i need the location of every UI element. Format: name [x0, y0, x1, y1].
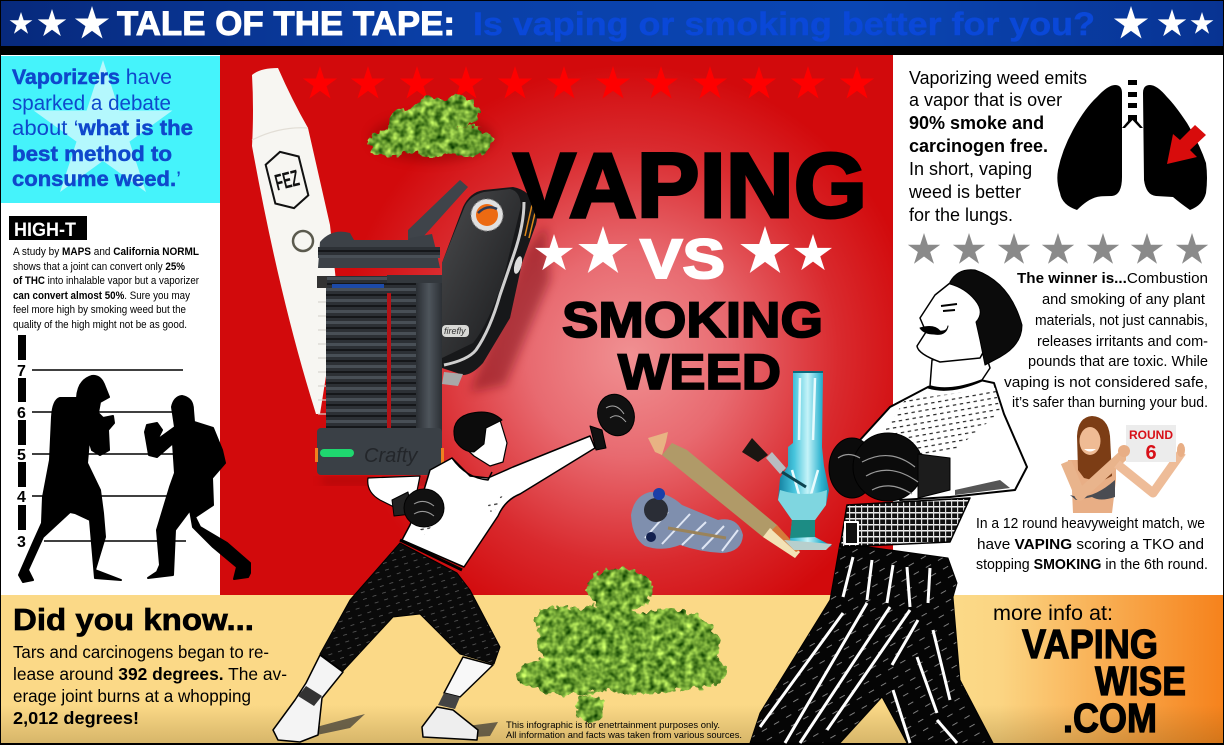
icon: crafty vaporizer: Crafty — [364, 445, 418, 467]
belt — [840, 498, 970, 547]
text: did you know — [13, 602, 287, 728]
text: lungs explanation: 90% smoke and — [909, 113, 1044, 133]
title: TALE OF THE TAPE: — [117, 5, 455, 43]
text: more info link — [993, 602, 1186, 741]
intro text: about ‘what is the — [12, 117, 193, 140]
torso and arm — [402, 436, 595, 567]
right leg and boot — [444, 657, 493, 697]
text: disclaimer — [506, 720, 742, 740]
heading: vaping vs smoking weed — [513, 135, 867, 400]
text: lungs explanation: for the lungs. — [909, 205, 1013, 225]
panel: did you know band — [1, 595, 1223, 743]
mouthpiece — [408, 180, 468, 248]
text: lungs explanation — [908, 68, 1087, 225]
icon: fez vape pen — [252, 68, 338, 414]
fez logo: FEZ — [272, 164, 302, 196]
round sign: 6 — [1145, 442, 1157, 464]
text: disclaimer: This infographic is for enetrtainment purposes only. — [506, 720, 720, 730]
round sign — [1126, 425, 1176, 464]
text: more info link: WISE — [1095, 658, 1186, 704]
arrow — [1167, 125, 1206, 164]
lid — [318, 232, 440, 268]
text: the winner is: vaping is not considered safe, — [1004, 374, 1208, 391]
text: the winner is: and smoking of any plant — [1042, 291, 1206, 308]
heading: vaping vs smoking weed: VS — [640, 227, 725, 290]
base — [317, 428, 442, 475]
intro text: Vaporizers have — [12, 66, 172, 89]
round sign: ROUND — [1129, 428, 1173, 442]
text: did you know: 2,012 degrees! — [13, 708, 139, 728]
icon: joint — [648, 432, 800, 558]
panel: intro cyan — [1, 56, 220, 203]
text: disclaimer: All information and facts was taken from various sources. — [506, 730, 742, 740]
icon: round card girl — [1066, 416, 1185, 513]
extended glove — [590, 389, 640, 450]
text: did you know: erage joint burns at a whopping — [13, 686, 251, 706]
ribbed body — [326, 276, 442, 432]
high-t body text: of THC into inhalable vapor but a vaporizer — [13, 275, 199, 287]
chart: height ruler: 5 — [17, 447, 26, 464]
text: more info link: .COM — [1063, 695, 1157, 741]
text: lungs explanation: weed is better — [908, 182, 1021, 202]
intro text: sparked a debate — [12, 92, 171, 115]
torso — [860, 380, 1027, 500]
text: tko summary: In a 12 round heavyweight match, we — [976, 515, 1205, 532]
icon: firefly vaporizer: firefly — [444, 326, 466, 336]
text: the winner is: materials, not just cannabis, — [1035, 312, 1208, 329]
head — [454, 412, 507, 466]
intro text — [12, 66, 193, 191]
icon: small weed bud — [368, 96, 494, 162]
high-t body text: feel more high by smoking weed but the — [13, 304, 186, 316]
chart: height ruler: 4 — [17, 489, 26, 506]
fez logo — [263, 148, 311, 212]
chart: height ruler — [17, 335, 186, 551]
icon: boxer silhouette left — [19, 376, 121, 582]
text: lungs explanation: In short, vaping — [909, 159, 1032, 179]
text: tko summary: have VAPING scoring a TKO and — [977, 536, 1204, 553]
heading: vaping vs smoking weed: VAPING — [513, 135, 867, 237]
text: more info link: more info at: — [993, 602, 1113, 625]
red star row — [303, 66, 874, 99]
text: the winner is: pounds that are toxic. While — [1028, 353, 1208, 370]
text: lungs explanation: carcinogen free. — [909, 136, 1048, 156]
intro text: consume weed. ’ — [12, 168, 181, 191]
text: lungs explanation: Vaporizing weed emits — [909, 68, 1087, 88]
text: the winner is: The winner is...Combustion — [1017, 270, 1208, 287]
left leg and boot — [273, 655, 343, 742]
icon: glass pipe — [631, 488, 743, 553]
high-t body text: quality of the high might not be as good. — [13, 319, 187, 331]
text: tko summary: stopping SMOKING in the 6th round. — [976, 556, 1208, 573]
panel: header banner — [1, 1, 1223, 46]
heading: high-t: HIGH-T — [14, 220, 76, 241]
high-t body text — [13, 246, 199, 331]
grey star row — [908, 233, 1208, 264]
icon: lungs — [1057, 80, 1207, 210]
header stars right — [1114, 6, 1213, 39]
pants — [750, 543, 993, 743]
high-t body text: A study by MAPS and California NORML — [13, 246, 199, 258]
icon: boxer silhouette right — [145, 396, 250, 579]
icon: large weed pile — [518, 568, 725, 722]
header stars left — [10, 6, 109, 39]
icon: firefly vaporizer — [442, 187, 550, 392]
text: the winner is — [1004, 270, 1208, 411]
text: tko summary — [976, 515, 1208, 573]
heading: vaping vs smoking weed: SMOKING — [562, 292, 823, 348]
gloves — [829, 433, 950, 501]
text: did you know: Did you know... — [13, 602, 254, 637]
text: did you know: lease around 392 degrees. The av- — [13, 664, 287, 684]
text: the winner is: releases irritants and com- — [1037, 333, 1208, 350]
chart: height ruler: 7 — [17, 363, 26, 380]
illustration: left boxer punching — [273, 389, 640, 742]
text: did you know: Tars and carcinogens began to re- — [13, 642, 269, 662]
pants — [320, 543, 500, 671]
text: more info link: VAPING — [1022, 621, 1158, 667]
text: the winner is: it’s safer than burning your bud. — [1012, 394, 1208, 411]
intro text: best method to — [12, 143, 172, 166]
head — [917, 270, 1022, 365]
icon: crafty vaporizer — [315, 180, 468, 484]
high-t body text: shows that a joint can convert only 25% — [13, 261, 185, 273]
back bent arm — [368, 476, 420, 516]
subtitle: Is vaping or smoking better for you? — [473, 6, 1095, 42]
heading: vaping vs smoking weed: WEED — [618, 344, 781, 400]
chart: height ruler: 6 — [17, 405, 26, 422]
chart: height ruler: 3 — [17, 534, 26, 551]
pant stripes — [760, 557, 957, 743]
panel: high-t — [9, 216, 199, 331]
icon: bong — [742, 372, 832, 550]
panel: white left and right columns — [1, 55, 1223, 596]
high-t body text: can convert almost 50%. Sure you may — [13, 290, 190, 302]
illustration: right boxer — [750, 270, 1027, 743]
neck — [930, 352, 990, 388]
guard glove — [392, 489, 444, 527]
foot shadows — [305, 714, 498, 738]
panel: red centre background — [220, 55, 893, 596]
text: lungs explanation: a vapor that is over — [909, 90, 1062, 110]
